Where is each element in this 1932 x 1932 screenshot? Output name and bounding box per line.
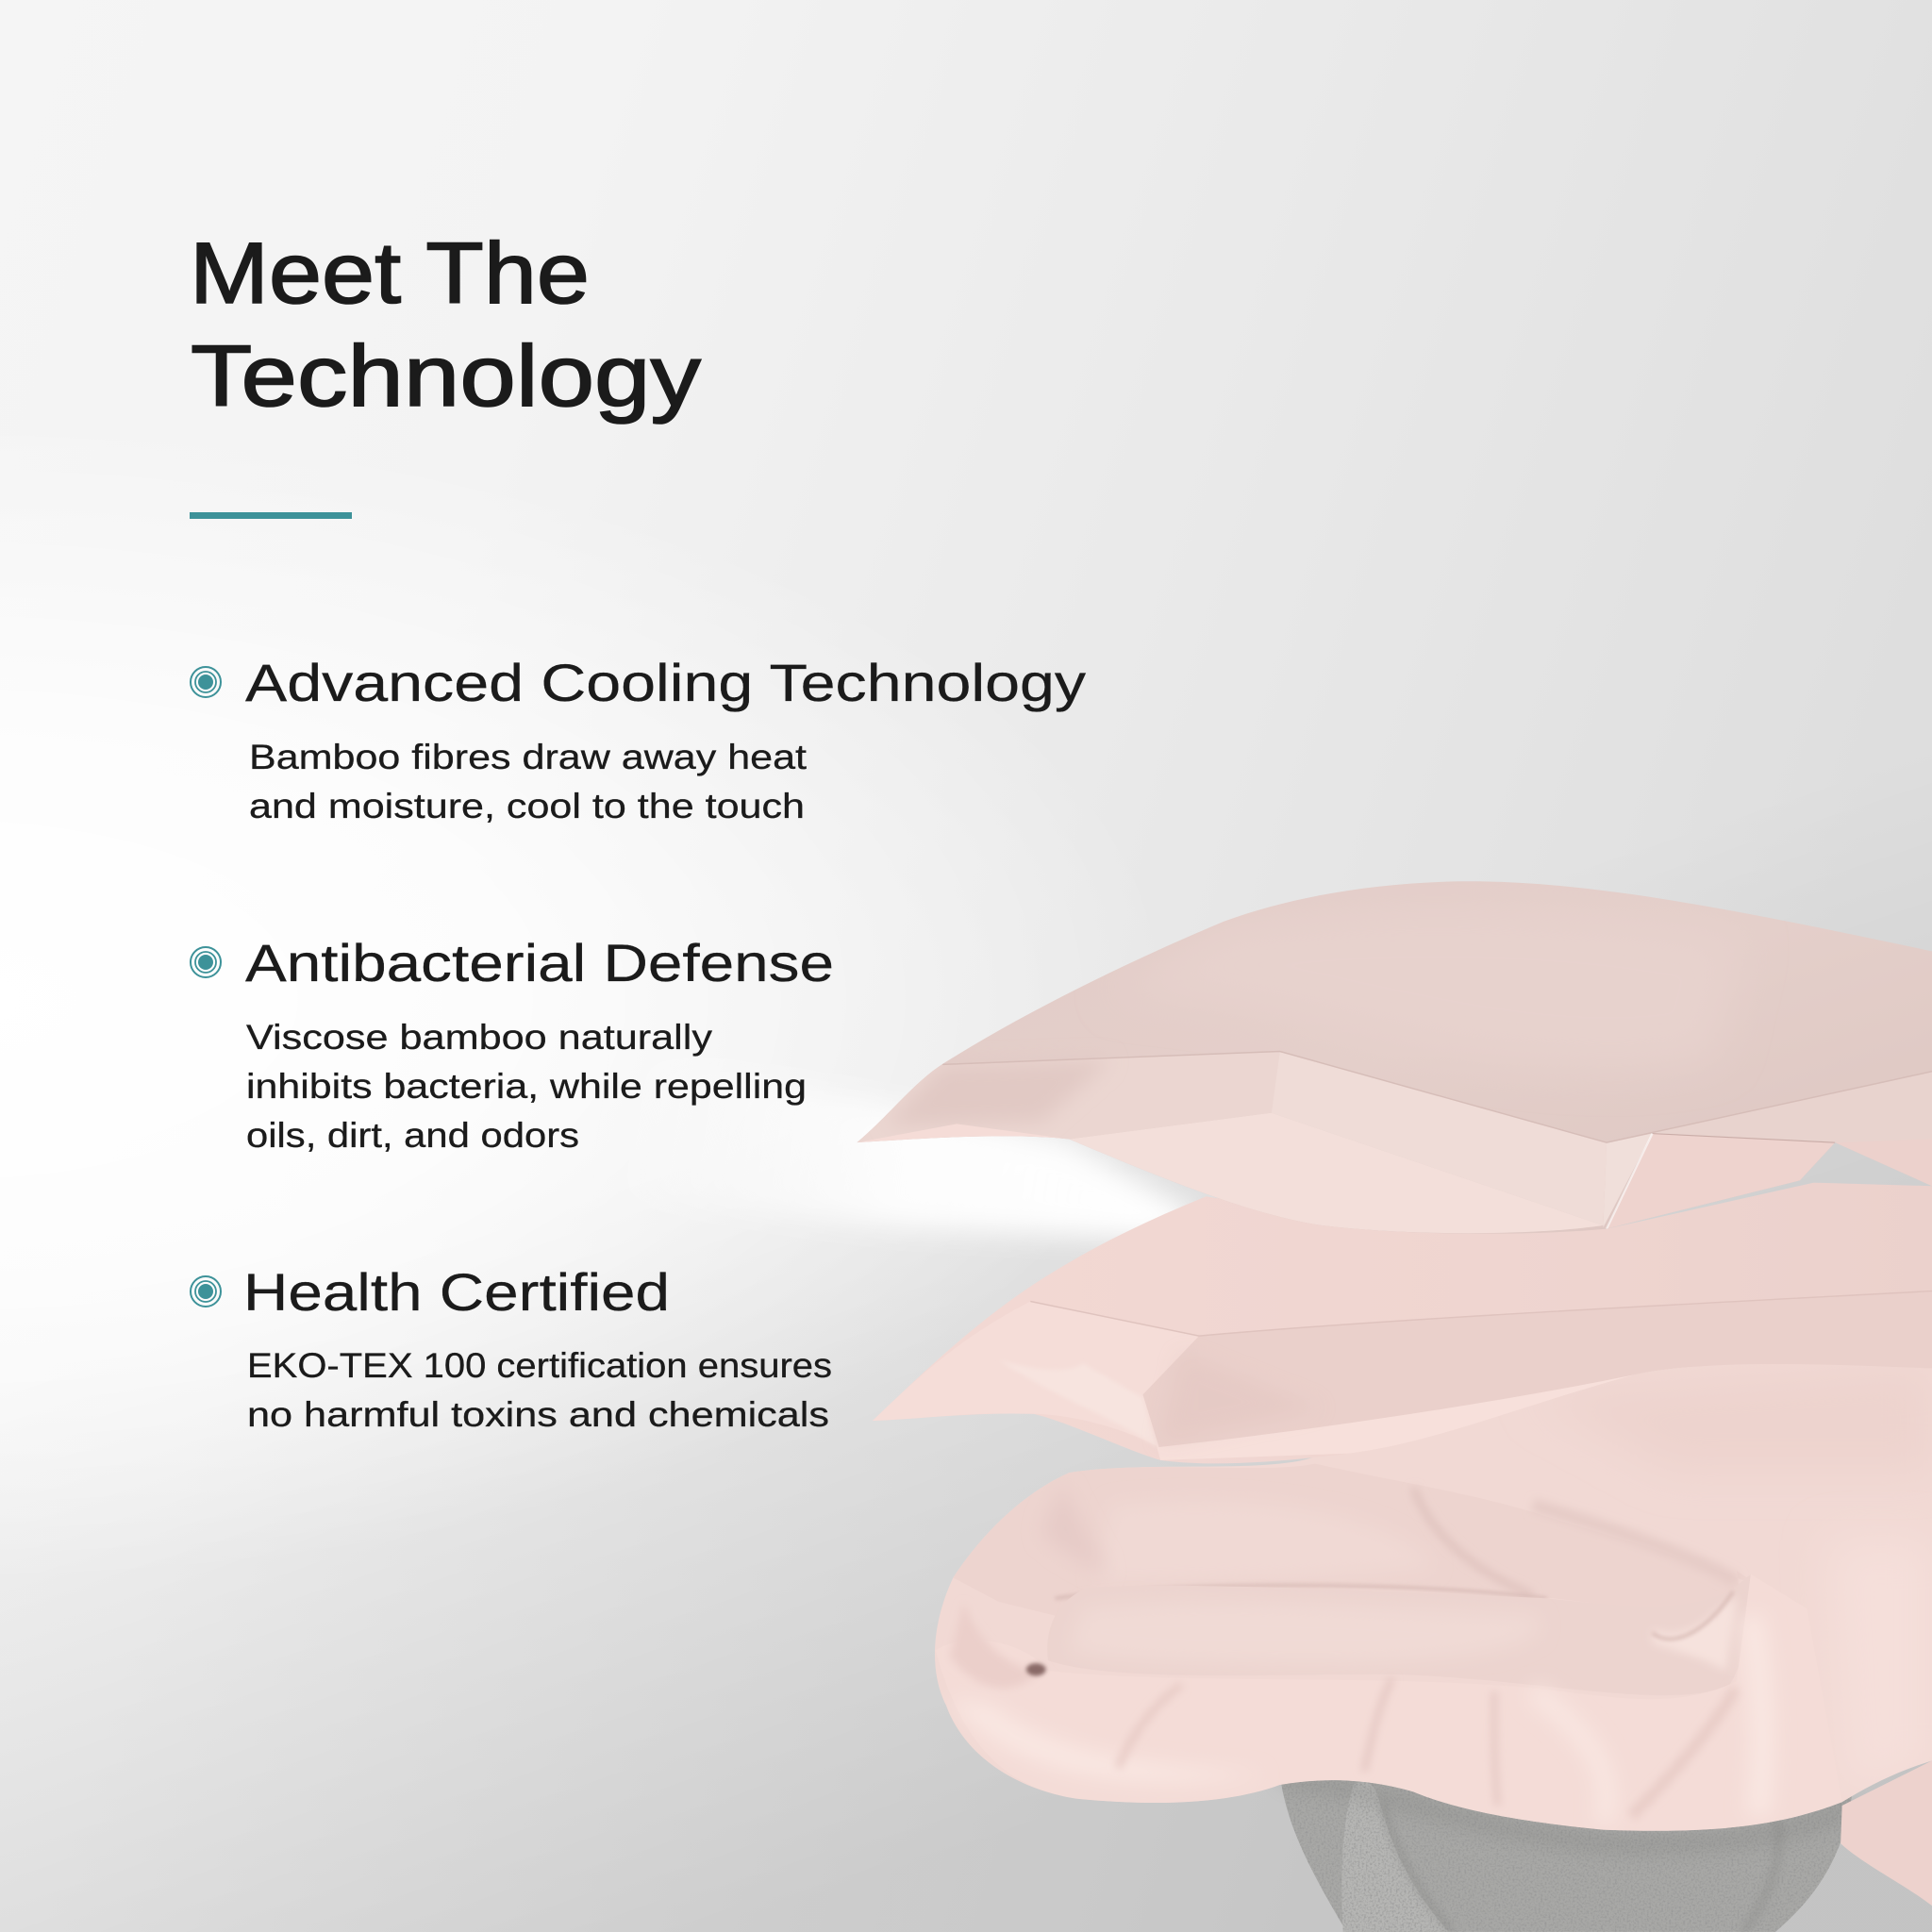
- icon: teal target bullet: [191, 947, 221, 977]
- teal divider bar: [190, 512, 352, 519]
- heading: Health Certified: [243, 1262, 670, 1322]
- folded duvet: [935, 1364, 1932, 1831]
- upper lobe: [953, 1464, 1807, 1623]
- lower pillow: [830, 1180, 1932, 1471]
- description: oils, dirt, and odors: [246, 1116, 579, 1155]
- feature: Antibacterial Defense: [191, 933, 834, 1155]
- title: Meet The: [190, 225, 590, 322]
- description: Viscose bamboo naturally: [246, 1018, 713, 1057]
- description: EKO-TEX 100 certification ensures: [247, 1346, 832, 1385]
- title: [190, 225, 701, 425]
- description: inhibits bacteria, while repelling: [246, 1067, 807, 1106]
- bottom lobe shading: [1108, 1581, 1841, 1831]
- description: Bamboo fibres draw away heat: [249, 738, 808, 776]
- dark fold hollow: [1026, 1663, 1046, 1675]
- upper pillow: [830, 870, 1932, 1242]
- middle roll: [1070, 1586, 1545, 1600]
- title: Technology: [191, 328, 701, 425]
- feature: Advanced Cooling Technology: [191, 653, 1086, 825]
- upper pillow back side: [1836, 1140, 1932, 1186]
- upper pillow centre flange: [1272, 1052, 1607, 1225]
- product: stacked pink bedding on stone head: [830, 870, 1932, 1932]
- upper pillow right flange: [1657, 1073, 1932, 1142]
- lower pillow front strip: [1143, 1332, 1743, 1447]
- lower pillow flange left: [873, 1302, 1199, 1447]
- pink fabric at back right: [1840, 1760, 1932, 1906]
- upper pillow right underside: [1607, 1134, 1835, 1229]
- heading: Advanced Cooling Technology: [245, 653, 1086, 712]
- heading: Antibacterial Defense: [245, 933, 834, 992]
- description: [246, 1018, 807, 1155]
- feature: Health Certified: [191, 1262, 832, 1434]
- description: [249, 738, 808, 825]
- upper pillow left flange: [869, 1055, 1277, 1136]
- lower pillow underside: [1158, 1375, 1631, 1460]
- icon: teal target bullet: [191, 1276, 221, 1307]
- description: no harmful toxins and chemicals: [247, 1395, 829, 1434]
- icon: teal target bullet: [191, 667, 221, 697]
- upper pillow underside: [1069, 1113, 1603, 1233]
- stone head base: [1280, 1774, 1853, 1932]
- description: [247, 1346, 832, 1434]
- description: and moisture, cool to the touch: [249, 787, 805, 825]
